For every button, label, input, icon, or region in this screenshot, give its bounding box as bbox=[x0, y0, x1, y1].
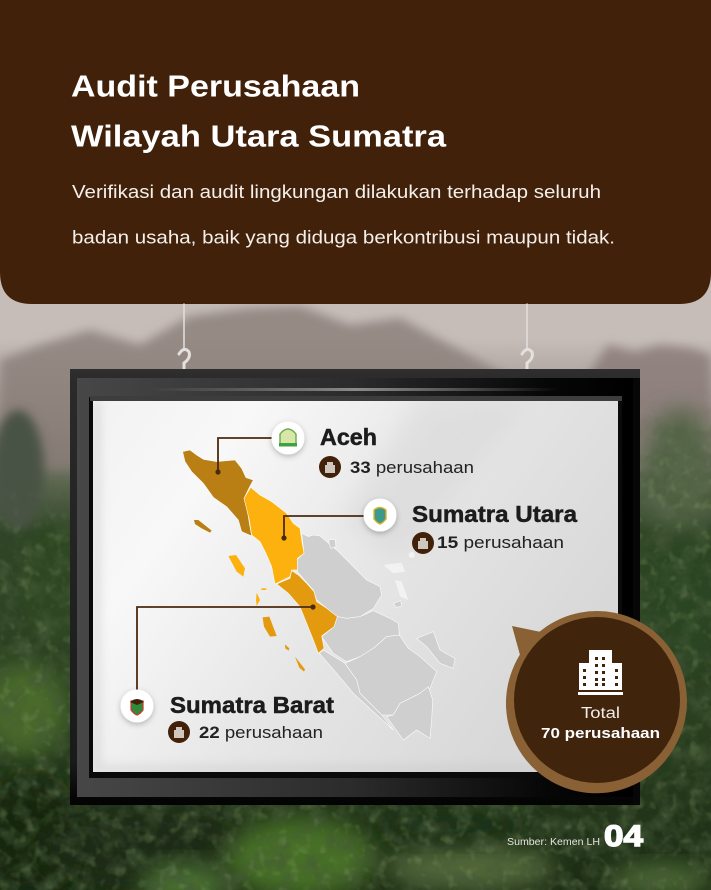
total bubble bbox=[506, 611, 687, 793]
total label: Total bbox=[581, 705, 620, 722]
leader dots bbox=[215, 469, 316, 610]
background: misty forest bbox=[0, 272, 711, 890]
icon: company bbox=[412, 532, 434, 554]
framed banner bbox=[70, 369, 640, 805]
label: Sumatra Utara bbox=[412, 501, 577, 527]
callout: Sumatra Utara bbox=[364, 498, 577, 554]
count: 22 perusahaan bbox=[199, 723, 323, 742]
header panel bbox=[0, 0, 711, 304]
label: Sumatra Barat bbox=[170, 692, 334, 718]
intro text bbox=[72, 181, 615, 248]
icon: Aceh emblem bbox=[272, 422, 304, 454]
title: Audit Perusahaan bbox=[71, 68, 360, 104]
page number: 04 bbox=[604, 820, 643, 853]
callout: Sumatra Barat bbox=[120, 690, 334, 743]
region: Aceh bbox=[183, 450, 253, 536]
icon: buildings bbox=[578, 650, 623, 695]
hanging hooks bbox=[179, 304, 532, 369]
small islands bbox=[383, 552, 415, 600]
banner cloth bbox=[93, 395, 618, 772]
icon: Sumatra Utara emblem bbox=[364, 498, 396, 532]
leader lines bbox=[137, 438, 364, 690]
region: Sumatra Barat bbox=[263, 571, 337, 672]
title: Wilayah Utara Sumatra bbox=[71, 118, 447, 154]
label: Aceh bbox=[320, 424, 377, 450]
map of northern Sumatra bbox=[183, 450, 455, 740]
region: Sumatra Utara bbox=[228, 487, 304, 606]
intro text: badan usaha, baik yang diduga berkontribusi maupun tidak. bbox=[72, 226, 615, 248]
icon: company bbox=[168, 721, 190, 743]
callout: Aceh bbox=[272, 422, 474, 478]
count: 15 perusahaan bbox=[437, 533, 564, 552]
total value: 70 perusahaan bbox=[541, 725, 660, 742]
title bbox=[71, 68, 447, 154]
intro text: Verifikasi dan audit lingkungan dilakukan terhadap seluruh bbox=[72, 181, 601, 202]
icon: Sumatra Barat emblem bbox=[120, 690, 154, 722]
icon: company bbox=[319, 456, 341, 478]
source: Sumber: Kemen LH bbox=[507, 837, 600, 848]
region: grey provinces bbox=[297, 533, 455, 740]
count: 33 perusahaan bbox=[350, 458, 474, 477]
